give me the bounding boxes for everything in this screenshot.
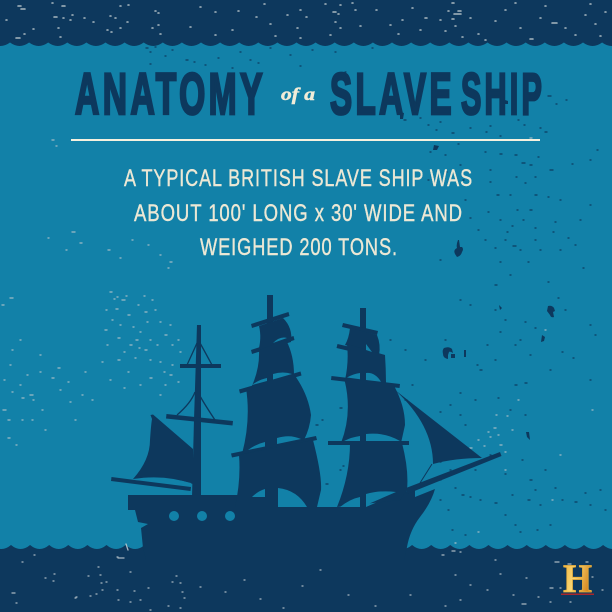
logo letter H: H <box>563 556 592 601</box>
title word: SLAVE: SLAVE <box>330 62 455 127</box>
portholes <box>169 511 235 521</box>
title word: ANATOMY: ANATOMY <box>75 62 266 127</box>
ship silhouette <box>111 295 502 560</box>
dark speckles on teal background <box>146 47 606 535</box>
description text <box>124 165 473 261</box>
teal gaps in sails <box>134 338 400 507</box>
light speckles on teal background <box>2 138 593 532</box>
wave band: top <box>0 0 612 46</box>
logo red underline <box>561 594 594 595</box>
title: Anatomy of a Slave Ship <box>75 62 545 127</box>
jib sail and bowsprit <box>395 390 502 494</box>
title rule <box>71 139 540 141</box>
wave band: bottom <box>0 543 612 612</box>
main mast and sails <box>231 295 321 507</box>
ink blots <box>400 100 555 440</box>
fore mast and sails <box>328 308 409 510</box>
description text: WEIGHED 200 TONS. <box>200 234 398 261</box>
title words: of a: of a <box>281 84 315 104</box>
description text: ABOUT 100' LONG x 30' WIDE AND <box>134 200 463 227</box>
mizzen mast <box>111 325 233 497</box>
description text: A TYPICAL BRITISH SLAVE SHIP WAS <box>124 165 473 192</box>
History channel logo <box>561 556 594 601</box>
hull <box>128 489 435 560</box>
